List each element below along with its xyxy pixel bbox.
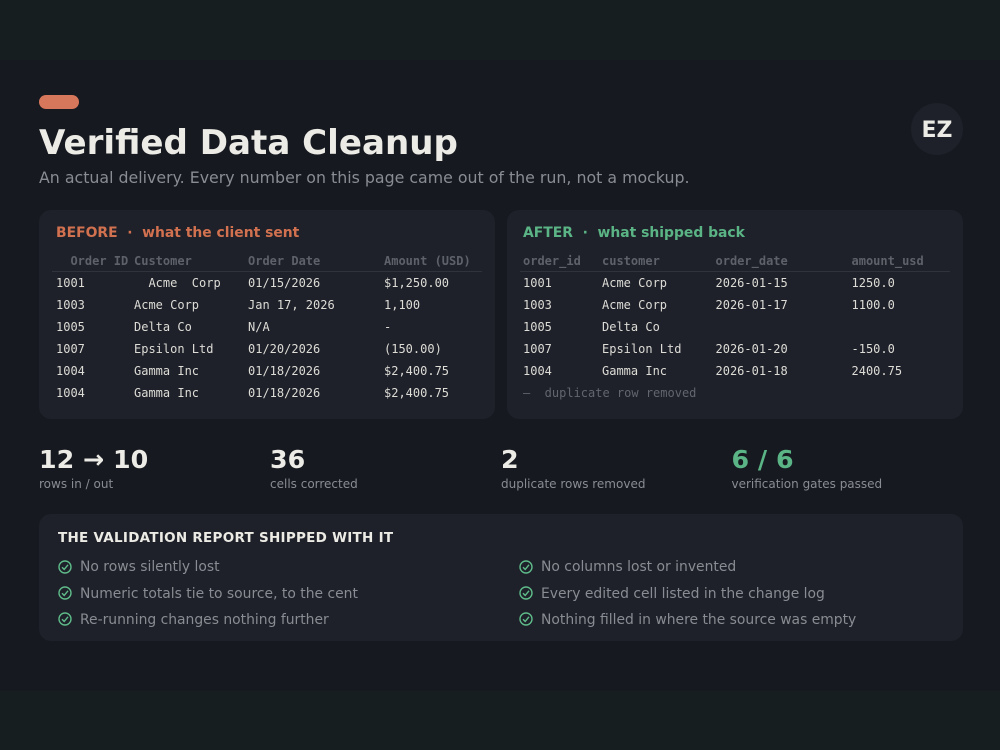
subtitle: An actual delivery. Every number on this page came out of the run, not a mockup.: [39, 168, 690, 187]
icon: check: [519, 612, 533, 626]
after row 4: Epsilon Ltd: [602, 342, 681, 356]
icon: check: [519, 560, 533, 574]
after row 5: [523, 364, 902, 378]
after row 4: [523, 342, 895, 356]
before row 1: Acme Corp: [148, 276, 221, 290]
before table header: Amount (USD): [384, 254, 471, 268]
after row 1: Acme Corp: [602, 276, 667, 290]
check item 3: [58, 612, 329, 628]
icon: check: [58, 560, 72, 574]
title: Verified Data Cleanup: [39, 123, 458, 163]
before row 4: Epsilon Ltd: [134, 342, 213, 356]
stat: verification gates passed: verification gates passed: [732, 477, 882, 491]
after row 1: 1001: [523, 276, 552, 290]
after row 4: -150.0: [852, 342, 895, 356]
after table header: amount_usd: [852, 254, 924, 268]
before row 2: Jan 17, 2026: [248, 298, 335, 312]
after row 2: 1100.0: [852, 298, 895, 312]
after row 2: [523, 298, 895, 312]
before row 4: [56, 342, 442, 356]
before row 2: 1003: [56, 298, 85, 312]
before row 4: 01/20/2026: [248, 342, 320, 356]
validation heading: THE VALIDATION REPORT SHIPPED WITH IT: [58, 530, 393, 546]
stat: cells corrected: [270, 445, 358, 491]
after row 5: 2026-01-18: [716, 364, 788, 378]
badge: EZ: [911, 103, 963, 155]
after row 5: Gamma Inc: [602, 364, 667, 378]
after row 1: [523, 276, 895, 290]
after row 3: 1005: [523, 320, 552, 334]
before row 5: $2,400.75: [384, 364, 449, 378]
text: No columns lost or invented: [541, 559, 736, 575]
before row 1: 01/15/2026: [248, 276, 320, 290]
after table header: order_id: [523, 254, 581, 268]
text: Every edited cell listed in the change log: [541, 586, 825, 602]
after row 5: 2400.75: [852, 364, 902, 378]
before row 3: N/A: [248, 320, 270, 334]
before row 3: [56, 320, 391, 334]
after row 3: [523, 320, 660, 334]
before row 6: $2,400.75: [384, 386, 449, 400]
after row 4: 1007: [523, 342, 552, 356]
stat: duplicate rows removed: 2: [501, 445, 519, 474]
stat: verification gates passed: 6 / 6: [732, 445, 794, 474]
before table header: Order ID: [70, 254, 128, 268]
before row 6: Gamma Inc: [134, 386, 199, 400]
after row 4: 2026-01-20: [716, 342, 788, 356]
before row 3: -: [384, 320, 391, 334]
before row 3: 1005: [56, 320, 85, 334]
icon: check: [58, 612, 72, 626]
after table header: [523, 254, 924, 268]
check item 1: [58, 559, 220, 575]
after row 3: Delta Co: [602, 320, 660, 334]
before heading: BEFORE · what the client sent: [56, 225, 299, 241]
check item 5: [519, 586, 825, 602]
before row 2: [56, 298, 420, 312]
panel: after: [507, 210, 963, 419]
after header rule: [520, 271, 950, 272]
text: Numeric totals tie to source, to the cent: [80, 586, 358, 602]
stat: rows in / out: [39, 445, 148, 491]
before row 1: [56, 276, 449, 290]
after table header: order_date: [716, 254, 788, 268]
after row 5: 1004: [523, 364, 552, 378]
before table header: Customer: [134, 254, 192, 268]
check item 4: [519, 559, 736, 575]
after row 2: 1003: [523, 298, 552, 312]
before row 5: 1004: [56, 364, 85, 378]
accent pill: [39, 95, 79, 109]
badge: EZ: EZ: [922, 118, 952, 143]
before row 5: Gamma Inc: [134, 364, 199, 378]
stat: verification gates passed: [732, 445, 882, 491]
before row 1: 1001: [56, 276, 85, 290]
icon: check: [519, 586, 533, 600]
before row 6: 01/18/2026: [248, 386, 320, 400]
panel: before: [39, 210, 495, 419]
before row 6: [56, 386, 449, 400]
before row 1: $1,250.00: [384, 276, 449, 290]
before row 4: (150.00): [384, 342, 442, 356]
after row 1: 2026-01-15: [716, 276, 788, 290]
after heading: AFTER · what shipped back: [523, 225, 745, 241]
stat: cells corrected: cells corrected: [270, 477, 358, 491]
stat: rows in / out: 12 → 10: [39, 445, 148, 474]
before row 5: [56, 364, 449, 378]
stat: cells corrected: 36: [270, 445, 305, 474]
after row 2: Acme Corp: [602, 298, 667, 312]
before header rule: [52, 271, 482, 272]
panel: validation report: [39, 514, 963, 641]
check item 6: [519, 612, 856, 628]
before row 5: 01/18/2026: [248, 364, 320, 378]
stat: rows in / out: rows in / out: [39, 477, 113, 491]
text: No rows silently lost: [80, 559, 220, 575]
after table header: customer: [602, 254, 660, 268]
icon: check: [58, 586, 72, 600]
duplicate removed note: — duplicate row removed: [523, 386, 696, 400]
stat: duplicate rows removed: duplicate rows removed: [501, 477, 645, 491]
text: Nothing filled in where the source was empty: [541, 612, 856, 628]
after row 2: 2026-01-17: [716, 298, 788, 312]
before table header: [70, 254, 471, 268]
before row 3: Delta Co: [134, 320, 192, 334]
check item 2: [58, 586, 358, 602]
stat: duplicate rows removed: [501, 445, 645, 491]
after row 1: 1250.0: [852, 276, 895, 290]
before table header: Order Date: [248, 254, 320, 268]
before row 2: 1,100: [384, 298, 420, 312]
before row 6: 1004: [56, 386, 85, 400]
text: Re-running changes nothing further: [80, 612, 329, 628]
before row 2: Acme Corp: [134, 298, 199, 312]
before row 4: 1007: [56, 342, 85, 356]
